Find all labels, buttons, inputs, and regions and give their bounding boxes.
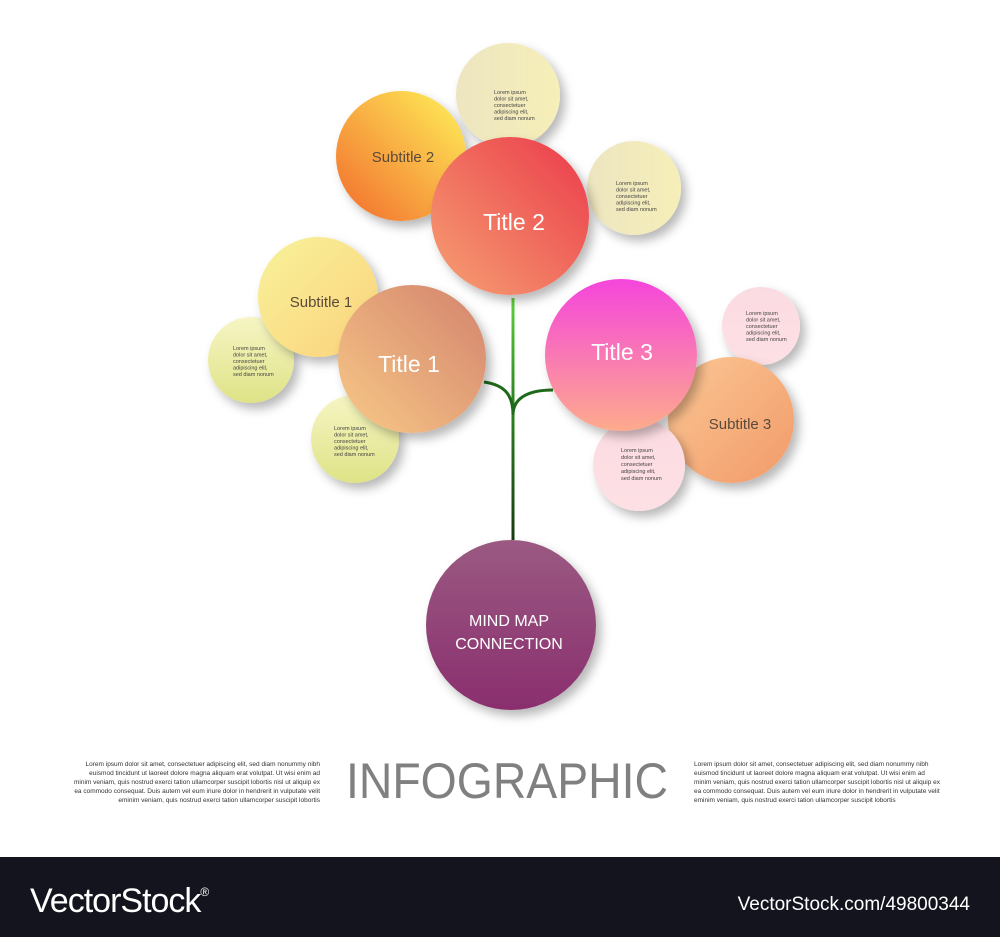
circle: Title 3	[545, 279, 697, 431]
circle: lorem pink bottom: dolor sit amet,	[621, 455, 656, 461]
footer logo: ®	[200, 885, 209, 899]
circle: Title 2: Title 2	[483, 209, 545, 235]
footer url: VectorStock.com/49800344	[738, 894, 970, 915]
circle: lorem pink bottom: consectetuer	[621, 462, 653, 468]
circle: lorem right: adipiscing elit,	[616, 200, 651, 206]
text block: right paragraph: ea commodo consequat. Duis autem vel eum iriure dolor in hendrerit in vulputate velit	[694, 788, 940, 795]
circle: lorem top right: consectetuer	[746, 324, 778, 330]
footer logo: VectorStock	[30, 882, 200, 920]
circle: lorem pink bottom: adipiscing elit,	[621, 469, 656, 475]
text block: right paragraph	[694, 761, 941, 804]
text block: right paragraph: eminim veniam, quis nostrud exerci tation ullamcorper suscipit lobortis	[694, 797, 896, 804]
circle: lorem top: Lorem ipsum	[494, 90, 526, 96]
circle: lorem left: adipiscing elit,	[233, 366, 268, 372]
stem connector	[484, 298, 553, 540]
circle: lorem right: sed diam nonum	[616, 207, 657, 213]
footer band	[0, 857, 1000, 937]
circle: lorem top: adipiscing elit,	[494, 110, 529, 116]
text block: left paragraph	[74, 761, 321, 804]
branch: Title 2	[336, 43, 681, 295]
main circle: mind map connection: CONNECTION	[455, 636, 563, 653]
circle: lorem below: sed diam nonum	[334, 452, 375, 458]
circle: lorem right	[587, 141, 681, 235]
circle: lorem below	[311, 395, 399, 483]
text block: right paragraph: euismod tincidunt ut laoreet dolore magna aliquam erat volutpat. Ut wisi enim ad	[694, 770, 925, 777]
circle: lorem top: dolor sit amet,	[494, 96, 529, 102]
text block: left paragraph: ea commodo consequat. Duis autem vel eum iriure dolor in hendrerit in vulputate velit	[74, 788, 320, 795]
circle: lorem left: sed diam nonum	[233, 372, 274, 378]
circle: lorem below: adipiscing elit,	[334, 446, 369, 452]
main circle: mind map connection	[426, 540, 596, 710]
circle: lorem below: consectetuer	[334, 439, 366, 445]
circle: lorem top right: Lorem ipsum	[746, 311, 778, 317]
text block: right paragraph: minim veniam, quis nostrud exerci tation ullamcorper suscipit lobortis nisl ut aliquip ex	[694, 779, 941, 786]
circle: lorem pink bottom: Lorem ipsum	[621, 448, 653, 454]
circle: Subtitle 2: Subtitle 2	[372, 149, 434, 166]
circle: Title 2	[431, 137, 589, 295]
circle: lorem left	[208, 317, 294, 403]
circle: lorem right: Lorem ipsum	[616, 181, 648, 187]
circle: lorem top right	[722, 287, 800, 365]
circle: lorem top: sed diam nonum	[494, 116, 535, 122]
circle: Title 3: Title 3	[591, 339, 653, 365]
text block: left paragraph: euismod tincidunt ut laoreet dolore magna aliquam erat volutpat. Ut wisi enim ad	[89, 770, 320, 777]
circle: lorem top	[456, 43, 560, 147]
branch: Title 3	[545, 279, 800, 511]
circle: lorem right: consectetuer	[616, 194, 648, 200]
circle: lorem top right: dolor sit amet,	[746, 318, 781, 324]
text block: left paragraph: minim veniam, quis nostrud exerci tation ullamcorper suscipit lobortis nisl ut aliquip ex	[74, 779, 321, 786]
circle: Subtitle 1	[258, 237, 378, 357]
circle: Title 1	[338, 285, 486, 433]
branch: Title 1	[208, 237, 486, 483]
circle: Subtitle 2	[336, 91, 466, 221]
circle: lorem top right: adipiscing elit,	[746, 330, 781, 336]
circle: lorem below: Lorem ipsum	[334, 426, 366, 432]
circle: lorem top: consectetuer	[494, 103, 526, 109]
text block: left paragraph: Lorem ipsum dolor sit amet, consectetuer adipiscing elit, sed diam nonummy nibh	[86, 761, 320, 768]
text block: left paragraph: eminim veniam, quis nostrud exerci tation ullamcorper suscipit lobortis	[118, 797, 321, 804]
circle: lorem left: Lorem ipsum	[233, 346, 265, 352]
circle: lorem top right: sed diam nonum	[746, 337, 787, 343]
circle: Title 1: Title 1	[378, 351, 440, 377]
circle: lorem right: dolor sit amet,	[616, 188, 651, 194]
circle: Subtitle 1: Subtitle 1	[290, 294, 352, 311]
circle: Subtitle 3	[668, 357, 794, 483]
title: INFOGRAPHIC: INFOGRAPHIC	[346, 753, 668, 809]
circle: lorem left: dolor sit amet,	[233, 352, 268, 358]
circle: lorem below: dolor sit amet,	[334, 432, 369, 438]
circle: lorem pink bottom: sed diam nonum	[621, 476, 662, 482]
text block: right paragraph: Lorem ipsum dolor sit amet, consectetuer adipiscing elit, sed diam nonummy nibh	[694, 761, 929, 768]
circle: lorem pink bottom	[593, 419, 685, 511]
circle: lorem left: consectetuer	[233, 359, 265, 365]
main circle: mind map connection: MIND MAP	[469, 613, 549, 630]
circle: Subtitle 3: Subtitle 3	[709, 416, 771, 433]
